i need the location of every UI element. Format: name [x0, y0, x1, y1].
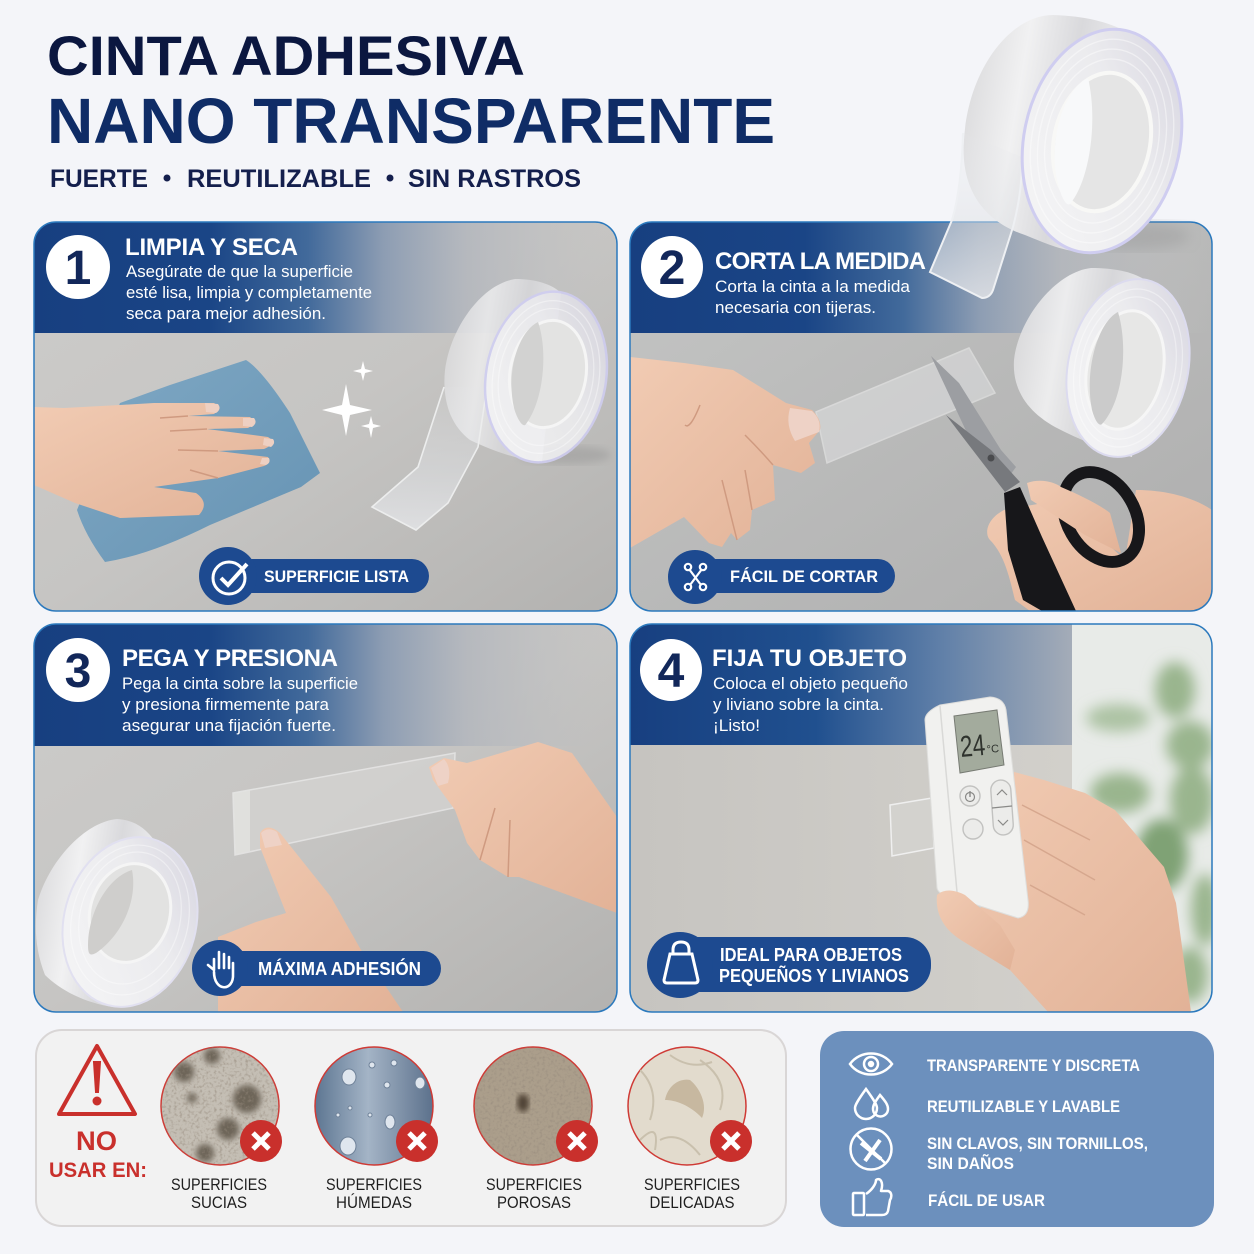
badge: ideal para objetos: PEQUEÑOS Y LIVIANOS [719, 965, 909, 986]
hand behind remote [961, 772, 1191, 1012]
icon: drops [855, 1089, 888, 1119]
icon: eye [850, 1054, 892, 1074]
subtitle: REUTILIZABLE [187, 165, 371, 193]
tape roll [372, 279, 620, 530]
step 3 text [122, 674, 358, 735]
step 1 text [126, 262, 372, 323]
towel [77, 360, 320, 562]
pointing hand [218, 828, 403, 1012]
badge: facil de cortar [668, 550, 895, 604]
surface: porosas [474, 1046, 598, 1212]
sparkles [322, 361, 381, 438]
step number 4 [640, 639, 702, 701]
benefit text 3: SIN DAÑOS [927, 1153, 1014, 1173]
step 2 text: necesaria con tijeras. [715, 298, 876, 317]
surface: delicadas: DELICADAS [650, 1194, 734, 1212]
badge: maxima adhesion [192, 940, 441, 996]
subtitle: FUERTE [50, 165, 148, 193]
tape under remote [890, 798, 934, 856]
step 4 text: Coloca el objeto pequeño [713, 674, 908, 693]
lcd reading: 24 [959, 729, 987, 764]
step number 1: 1 [65, 242, 91, 295]
tape strip on wall [233, 753, 455, 855]
hand wiping [34, 403, 274, 518]
panel: step 4 [630, 624, 1219, 1012]
icon: warning triangle [59, 1046, 135, 1114]
thumb [937, 890, 1015, 970]
panel: step 3 [34, 624, 617, 1022]
scissors [931, 356, 1154, 611]
blurred plant [1086, 662, 1219, 1003]
surface: porosas: POROSAS [497, 1194, 571, 1212]
surface: sucias: SUCIAS [191, 1194, 247, 1212]
step 1 heading: LIMPIA Y SECA [125, 234, 298, 261]
panel: no usar en [36, 1030, 786, 1226]
step 4 heading: FIJA TU OBJETO [712, 645, 907, 672]
step 2 heading: CORTA LA MEDIDA [715, 248, 926, 275]
step number 3: 3 [65, 645, 91, 698]
step 4 text: y liviano sobre la cinta. [713, 695, 884, 714]
icon: no tools [850, 1128, 892, 1170]
subtitle [50, 165, 581, 193]
step number 1 [46, 235, 110, 299]
benefit text 3: SIN CLAVOS, SIN TORNILLOS, [927, 1134, 1148, 1153]
right hand pressing [429, 742, 617, 913]
no usar en label: USAR EN: [49, 1159, 147, 1182]
benefit text 4: FÁCIL DE USAR [928, 1191, 1045, 1210]
step 1 text: esté lisa, limpia y completamente [126, 283, 372, 302]
panel: step 1 [34, 222, 620, 611]
step 1 text: Asegúrate de que la superficie [126, 262, 353, 281]
icon: thumbs up [853, 1179, 891, 1215]
step number 3 [46, 638, 110, 702]
remote control [925, 697, 1028, 918]
step 3 text: Pega la cinta sobre la superficie [122, 674, 358, 693]
panel: step 2 [630, 222, 1212, 611]
badge: ideal para objetos: IDEAL PARA OBJETOS [720, 945, 902, 965]
surface: delicadas [628, 1047, 752, 1212]
step 2 text [715, 277, 911, 317]
step 1 text: seca para mejor adhesión. [126, 304, 326, 323]
second roll [1014, 268, 1191, 458]
benefit text 2: REUTILIZABLE Y LAVABLE [927, 1097, 1120, 1116]
right hand [987, 490, 1212, 611]
surface: sucias: SUPERFICIES [171, 1176, 267, 1194]
surface: delicadas: SUPERFICIES [644, 1176, 740, 1194]
badge: maxima adhesion: MÁXIMA ADHESIÓN [258, 958, 421, 979]
panel: benefits [820, 1031, 1214, 1227]
step number 2 [641, 236, 703, 298]
surface: humedas [315, 1047, 438, 1212]
no usar en label: NO [76, 1126, 117, 1156]
step 3 heading: PEGA Y PRESIONA [122, 645, 338, 672]
hero tape roll [930, 14, 1202, 298]
roll [36, 819, 198, 1008]
title: NANO TRANSPARENTE [47, 85, 775, 157]
step 4 text [713, 674, 908, 735]
title: CINTA ADHESIVA [47, 24, 525, 87]
surface: sucias [160, 1046, 282, 1212]
surface: humedas: SUPERFICIES [326, 1176, 422, 1194]
step 3 text: asegurar una fijación fuerte. [122, 716, 336, 735]
surface: humedas: HÚMEDAS [336, 1193, 412, 1212]
benefit text 1: TRANSPARENTE Y DISCRETA [927, 1056, 1140, 1075]
subtitle: SIN RASTROS [408, 165, 581, 193]
cut tape strip [816, 348, 995, 463]
no usar en label [49, 1126, 147, 1182]
step 3 text: y presiona firmemente para [122, 695, 330, 714]
badge: facil de cortar: FÁCIL DE CORTAR [730, 567, 878, 586]
title [47, 24, 775, 157]
badge: superficie lista [199, 547, 429, 605]
surface: porosas: SUPERFICIES [486, 1176, 582, 1194]
left hand [630, 357, 820, 548]
badge: superficie lista: SUPERFICIE LISTA [264, 567, 409, 586]
thumb [1027, 481, 1121, 553]
badge: ideal para objetos [647, 932, 931, 998]
step number 4: 4 [658, 645, 685, 698]
remote control: °C [986, 743, 1000, 756]
step 4 text: ¡Listo! [713, 716, 760, 735]
benefit text 3 [927, 1134, 1148, 1173]
step 2 text: Corta la cinta a la medida [715, 277, 911, 296]
step number 2: 2 [659, 242, 685, 295]
